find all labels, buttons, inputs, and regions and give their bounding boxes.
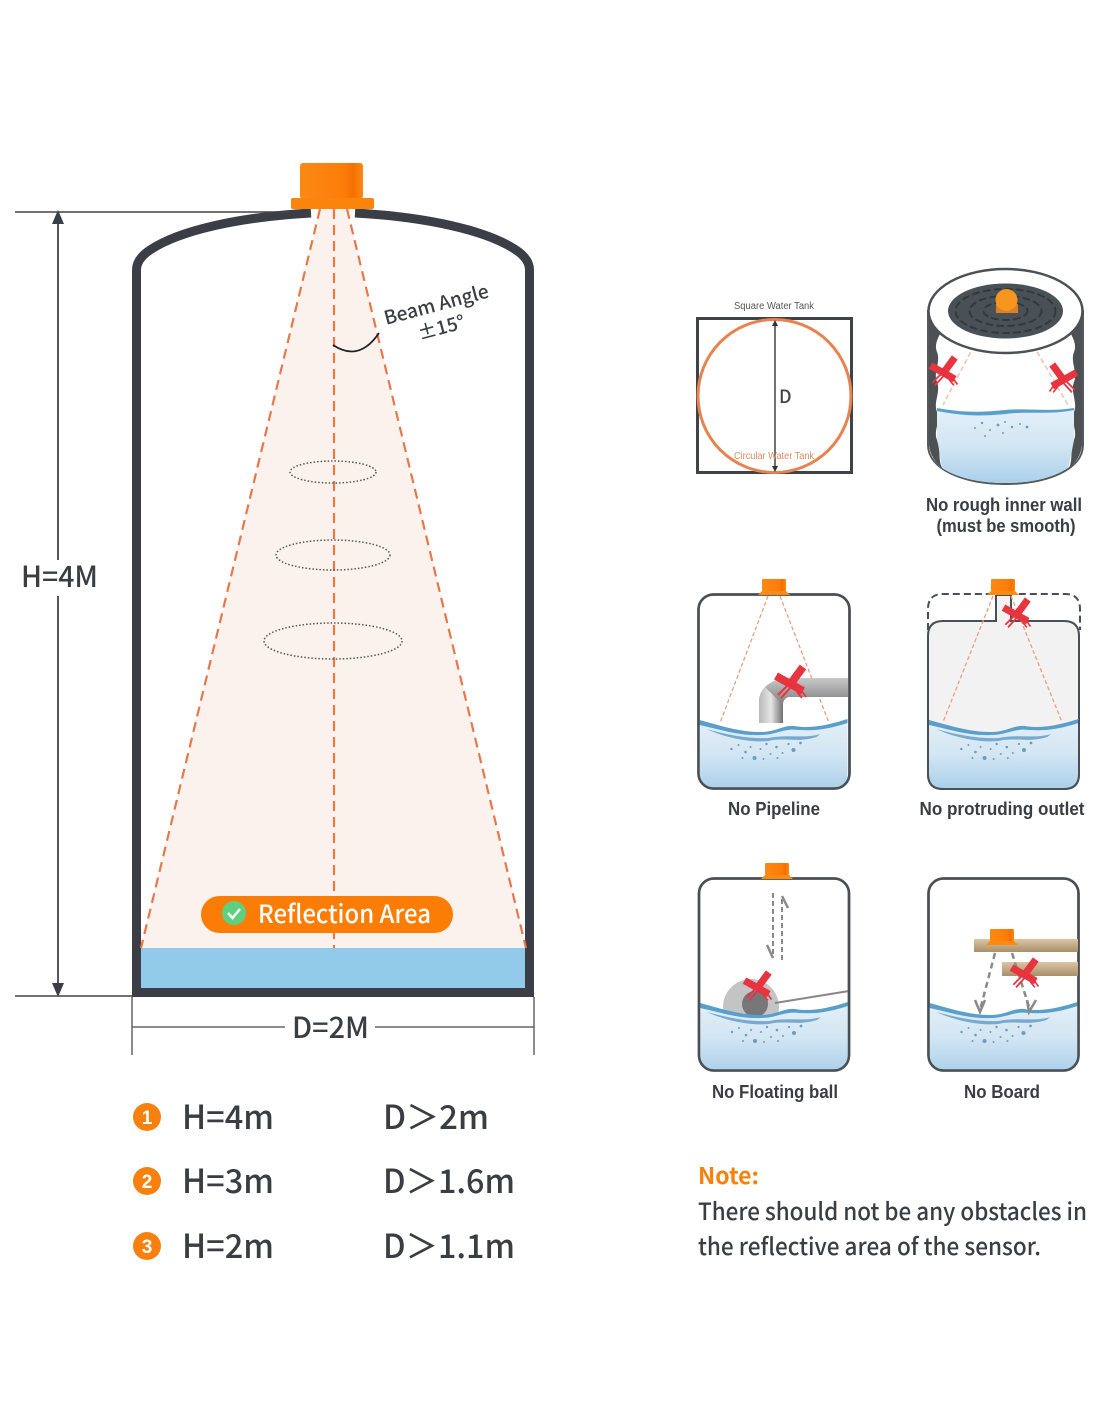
red crosses bbox=[930, 358, 958, 385]
beam dashed lines bbox=[141, 209, 526, 948]
echo arrows bbox=[767, 893, 788, 960]
panel: no floating ball bbox=[699, 863, 849, 1072]
spec 2: H=3m bbox=[182, 1155, 274, 1203]
cylinder top bbox=[928, 269, 1082, 353]
spec 2: D＞1.6m bbox=[383, 1155, 515, 1203]
beam angle label: ±15° bbox=[414, 308, 468, 346]
label: no rough inner wall: No rough inner wall bbox=[926, 495, 1082, 515]
beam cone bbox=[141, 209, 526, 948]
spec 1: H=4m bbox=[182, 1091, 274, 1139]
note: the reflective area of the sensor. bbox=[698, 1227, 1041, 1262]
spec 3: H=2m bbox=[182, 1220, 274, 1268]
label: no floating ball: No Floating ball bbox=[712, 1082, 838, 1102]
label: no board: No Board bbox=[964, 1082, 1040, 1102]
note bbox=[698, 1157, 1087, 1262]
reflection area pill bbox=[201, 895, 453, 933]
spec 2 bbox=[133, 1155, 515, 1203]
label: no rough inner wall: (must be smooth) bbox=[936, 516, 1076, 536]
panel: square vs circular tank bbox=[698, 301, 852, 472]
reflection area pill: Reflection Area bbox=[258, 895, 431, 931]
floating ball bbox=[723, 979, 849, 1035]
spec 3: D＞1.1m bbox=[383, 1220, 515, 1268]
sensor head bbox=[291, 163, 374, 209]
spec 1: 1 bbox=[142, 1108, 153, 1129]
panel: square vs circular tank: Square Water Tank bbox=[734, 301, 815, 312]
panel: no pipeline bbox=[698, 579, 850, 789]
spec 1 bbox=[133, 1091, 489, 1139]
wavy walls bbox=[929, 320, 942, 468]
diameter dimension: D=2M bbox=[292, 1005, 369, 1047]
beam angle label: Beam Angle bbox=[381, 277, 491, 331]
pipe bbox=[759, 678, 848, 723]
dotted cross-sections bbox=[264, 461, 402, 659]
spec 1: D＞2m bbox=[383, 1091, 489, 1139]
beam angle arc bbox=[333, 333, 379, 352]
panel: main tank diagram bbox=[15, 163, 534, 1055]
diameter dimension bbox=[132, 997, 534, 1055]
water in cylinder bbox=[937, 408, 1074, 483]
label: no pipeline: No Pipeline bbox=[728, 799, 820, 819]
height dimension bbox=[15, 210, 290, 997]
label: no protruding outlet: No protruding outlet bbox=[920, 799, 1084, 819]
panel: square vs circular tank: D bbox=[779, 383, 792, 409]
red cross right bbox=[1050, 364, 1076, 392]
sensor top view bbox=[996, 289, 1018, 313]
echo lines bbox=[975, 953, 1036, 1012]
panel: no rough inner wall bbox=[928, 269, 1083, 484]
panel: no protruding outlet bbox=[928, 579, 1080, 789]
spec 3 bbox=[133, 1220, 515, 1268]
spec 2: 2 bbox=[142, 1172, 152, 1193]
height dimension: H=4M bbox=[21, 554, 98, 596]
spec list bbox=[133, 1091, 515, 1268]
spec 3: 3 bbox=[142, 1237, 152, 1258]
tank outline bbox=[136, 213, 530, 992]
water surface bbox=[141, 948, 526, 988]
beam lines bbox=[943, 338, 1068, 405]
note: Note: bbox=[698, 1157, 759, 1191]
label: no rough inner wall bbox=[926, 495, 1082, 536]
boards bbox=[974, 939, 1078, 976]
panel: square vs circular tank: Circular Water Tank bbox=[734, 451, 815, 462]
panel: no board bbox=[928, 878, 1078, 1072]
